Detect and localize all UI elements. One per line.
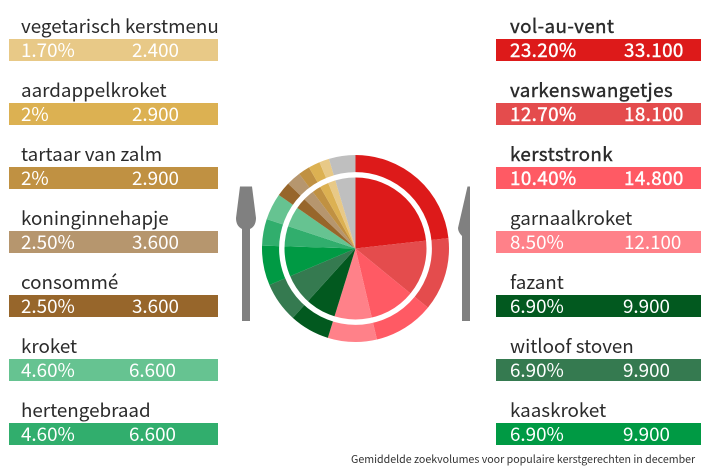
item: witloof stoven: witloof stoven [510,332,634,359]
item: varkenswangetjes: varkenswangetjes [510,76,673,103]
item: tartaar van zalm [9,140,218,191]
item: tartaar van zalm: tartaar van zalm [21,140,162,167]
item: kaaskroket: 6.90% [510,420,564,447]
item: kaaskroket [496,396,701,447]
item: witloof stoven [496,332,701,383]
item: varkenswangetjes: 18.100 [624,100,684,127]
item: kroket: kroket [21,332,77,359]
item: fazant: 6.90% [510,292,564,319]
item: hertengebraad: 6.600 [129,420,176,447]
panel: right list [496,12,701,447]
pie chart [309,202,402,295]
item: aardappelkroket [9,76,218,127]
item: aardappelkroket: aardappelkroket [21,76,167,103]
item: tartaar van zalm: 2% [21,164,49,191]
item: tartaar van zalm: 2.900 [132,164,179,191]
item: aardappelkroket: 2.900 [132,100,179,127]
item: consommé [9,268,218,319]
icon: fork [236,186,256,321]
item: vol-au-vent [496,12,701,63]
item: witloof stoven: 9.900 [623,356,670,383]
item: kerststronk: kerststronk [510,140,613,167]
item: vegetarisch kerstmenu: 1.70% [21,36,75,63]
item: vegetarisch kerstmenu [9,12,219,63]
item: consommé: consommé [21,268,118,295]
item: vegetarisch kerstmenu: vegetarisch kerstmenu [21,12,219,39]
item: koninginnehapje: 3.600 [132,228,179,255]
plate rim ring [282,175,429,322]
item: vegetarisch kerstmenu: 2.400 [132,36,179,63]
item: garnaalkroket: 12.100 [624,228,681,255]
icon: knife [458,186,470,321]
item: varkenswangetjes [496,76,701,127]
item: kroket: 6.600 [129,356,176,383]
item: hertengebraad: 4.60% [21,420,75,447]
item: kaaskroket: 9.900 [623,420,670,447]
item: kerststronk: 14.800 [624,164,684,191]
item: kroket [9,332,218,383]
item: aardappelkroket: 2% [21,100,49,127]
item: garnaalkroket [496,204,701,255]
item: vol-au-vent: vol-au-vent [510,12,614,39]
item: varkenswangetjes: 12.70% [510,100,577,127]
footnote: Gemiddelde zoekvolumes voor populaire kerstgerechten in december [351,452,695,467]
item: consommé: 3.600 [132,292,179,319]
item: hertengebraad [9,396,218,447]
item: garnaalkroket: garnaalkroket [510,204,632,231]
item: hertengebraad: hertengebraad [21,396,151,423]
panel: left list [9,12,219,447]
item: witloof stoven: 6.90% [510,356,564,383]
item: koninginnehapje [9,204,218,255]
item: consommé: 2.50% [21,292,75,319]
item: koninginnehapje: 2.50% [21,228,75,255]
item: kerststronk [496,140,701,191]
item: kerststronk: 10.40% [510,164,577,191]
item: fazant [496,268,701,319]
item: vol-au-vent: 23.20% [510,36,577,63]
item: koninginnehapje: koninginnehapje [21,204,169,231]
item: kaaskroket: kaaskroket [510,396,606,423]
item: fazant: fazant [510,268,564,295]
item: garnaalkroket: 8.50% [510,228,564,255]
item: vol-au-vent: 33.100 [624,36,684,63]
item: kroket: 4.60% [21,356,75,383]
item: fazant: 9.900 [623,292,670,319]
